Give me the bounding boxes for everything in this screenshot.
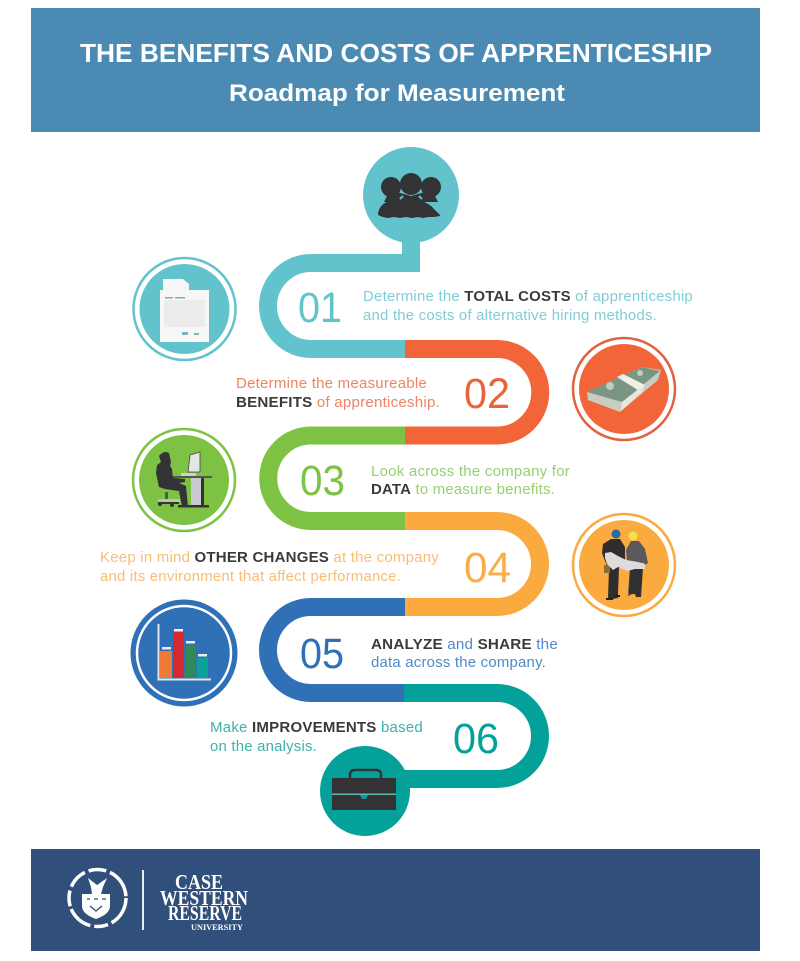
icon: workers with blueprint	[573, 514, 675, 616]
logo: Case Western Reserve University: CASE	[175, 870, 223, 894]
text 03: DATA to measure benefits.	[371, 482, 555, 498]
text 04	[100, 550, 440, 585]
text 03	[371, 464, 570, 498]
text 01: and the costs of alternative hiring methods.	[363, 308, 657, 324]
text 06	[210, 720, 423, 755]
icon: printer	[134, 258, 236, 360]
text 01	[363, 289, 693, 324]
icon: money stack	[573, 338, 675, 440]
header banner	[31, 8, 760, 132]
text 04: Keep in mind OTHER CHANGES at the company	[100, 550, 440, 566]
number 02: 02	[464, 370, 510, 418]
text 05: data across the company.	[371, 655, 546, 671]
icon: person at computer	[133, 429, 235, 531]
step 06	[210, 715, 499, 763]
step 02	[236, 370, 510, 418]
logo: department seal	[69, 870, 126, 926]
text 02: BENEFITS of apprenticeship.	[236, 395, 440, 411]
step 01	[298, 284, 693, 332]
step 04	[100, 544, 511, 592]
number 01: 01	[298, 284, 342, 332]
icon: bar chart	[130, 600, 238, 706]
icon: people group	[363, 147, 459, 243]
number 05: 05	[300, 630, 344, 678]
text 02: Determine the measureable	[236, 376, 427, 392]
text 06: on the analysis.	[210, 739, 317, 755]
text 04: and its environment that affect performance.	[100, 569, 401, 585]
subtitle: Roadmap for Measurement	[229, 80, 565, 107]
title: THE BENEFITS AND COSTS OF APPRENTICESHIP	[80, 40, 712, 68]
logo: Case Western Reserve University: WESTERN	[160, 886, 248, 910]
step 05	[300, 630, 558, 678]
text 06: Make IMPROVEMENTS based	[210, 720, 423, 736]
divider	[142, 870, 144, 930]
text 05: ANALYZE and SHARE the	[371, 637, 558, 653]
text 02	[236, 376, 440, 411]
number 04: 04	[464, 544, 511, 592]
logo: Case Western Reserve University: UNIVERSITY	[191, 923, 243, 932]
icon: briefcase	[320, 746, 410, 836]
number 03: 03	[300, 457, 345, 505]
logo: Case Western Reserve University: RESERVE	[168, 901, 242, 925]
text 05	[371, 637, 558, 671]
logo: Case Western Reserve University	[160, 870, 248, 932]
step 03	[300, 457, 570, 505]
roadmap path	[268, 235, 540, 779]
number 06: 06	[453, 715, 499, 763]
text 03: Look across the company for	[371, 464, 570, 480]
footer banner	[31, 849, 760, 951]
text 01: Determine the TOTAL COSTS of apprenticeship	[363, 289, 693, 305]
